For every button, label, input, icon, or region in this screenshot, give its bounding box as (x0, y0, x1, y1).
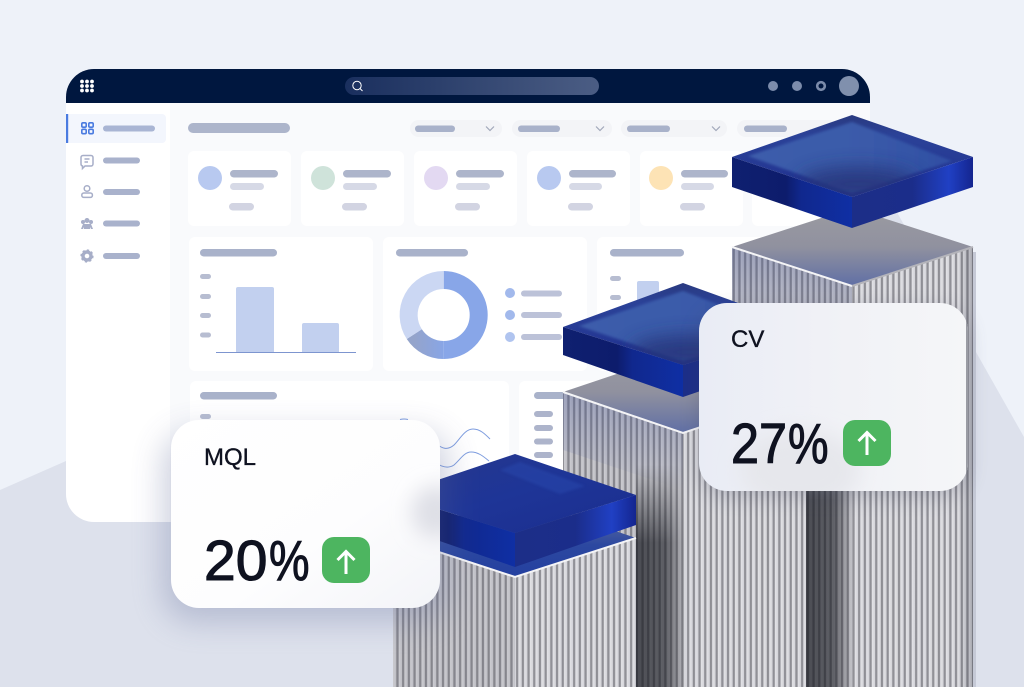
tower right face (515, 538, 636, 687)
shadow cast by left tower (636, 465, 686, 687)
line chart card (190, 381, 509, 522)
tower right face (852, 247, 973, 687)
value: % (788, 411, 829, 475)
search bar (345, 77, 599, 95)
line chart waves (400, 419, 490, 467)
header controls (768, 76, 859, 96)
tower left face (732, 247, 852, 687)
page title placeholder (188, 123, 290, 133)
tower top face (563, 351, 806, 433)
bar chart card (189, 237, 373, 371)
shadow cast by middle tower (806, 491, 850, 687)
tower edge highlight (393, 537, 636, 577)
stat card 1 (188, 151, 291, 226)
icon: app grid (80, 80, 94, 92)
tower right face (683, 392, 806, 687)
value (204, 528, 310, 593)
top navigation bar (66, 69, 870, 103)
icon: green up arrow (322, 537, 370, 583)
tower: right (732, 208, 976, 687)
glass plate: top (732, 115, 973, 228)
value: 27 (731, 412, 787, 476)
tower: middle (563, 351, 806, 687)
stat card 5 (640, 151, 743, 226)
filter dropdowns (410, 120, 837, 137)
icon: group (81, 218, 93, 229)
glass plate: left (393, 454, 636, 567)
dashboard window (66, 69, 870, 522)
donut legend (505, 288, 562, 342)
label: MQL (204, 444, 256, 471)
tower left face (563, 392, 683, 687)
stat card 4 (527, 151, 630, 226)
third chart card (597, 237, 817, 371)
tower: left (393, 497, 636, 687)
icon: messages (81, 156, 93, 168)
glass plate: middle (563, 283, 738, 397)
icon: dashboard (82, 123, 93, 134)
stat card 6 (752, 151, 852, 226)
donut chart (409, 280, 479, 350)
stat card 3 (414, 151, 517, 226)
metric card: CV (699, 303, 968, 510)
tower left face (393, 537, 515, 687)
tower edge highlight (563, 392, 806, 433)
icon: green up arrow (843, 420, 891, 466)
sidebar (66, 114, 166, 262)
stat cards row (188, 151, 852, 226)
value: % (269, 528, 310, 592)
icon: settings gear (81, 250, 93, 262)
list card (519, 381, 639, 522)
background mountain shape (0, 200, 1024, 687)
tower top face (732, 208, 973, 286)
icon: user (82, 186, 92, 197)
value (731, 411, 829, 476)
tower edge highlight (732, 247, 973, 286)
tower top face (393, 497, 636, 577)
stat card 2 (301, 151, 404, 226)
label: CV (731, 326, 764, 353)
donut chart card (383, 237, 587, 371)
value: 20 (204, 529, 267, 593)
metric card: MQL (163, 420, 460, 622)
